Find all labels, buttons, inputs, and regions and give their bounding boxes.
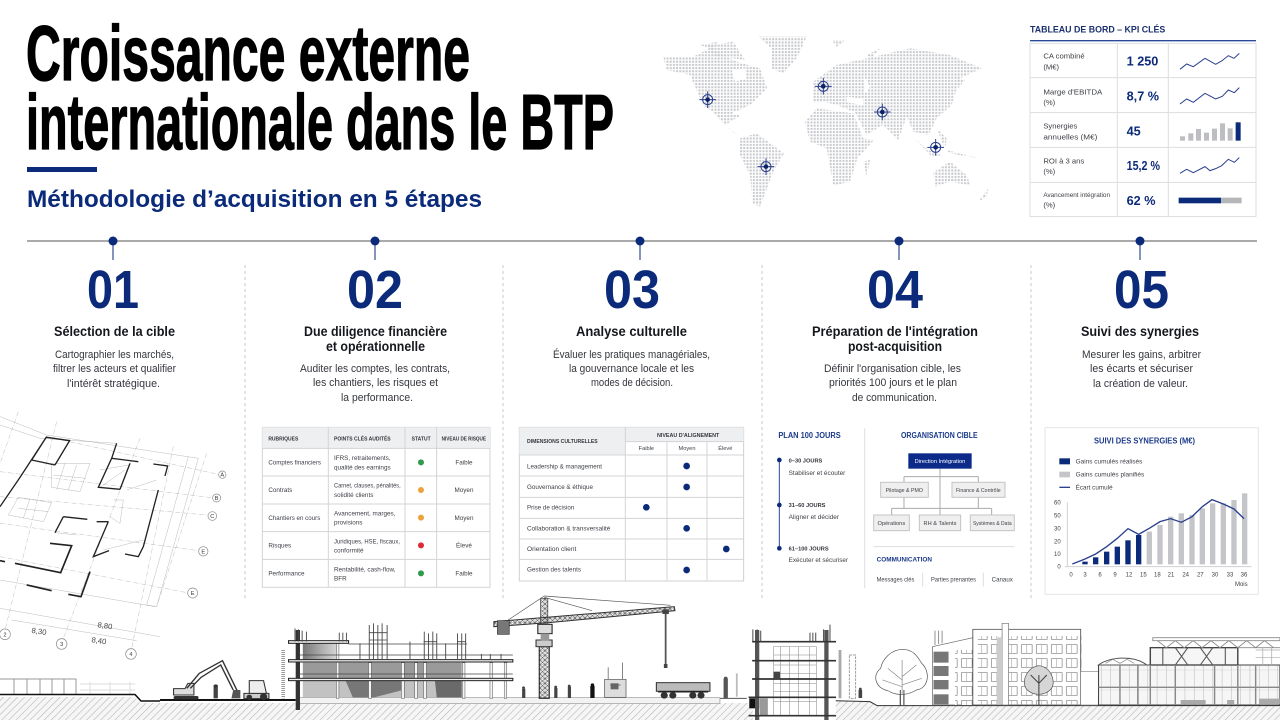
- blueprint floor plan: 2: [3, 632, 7, 638]
- section building: [749, 625, 862, 720]
- synergy chart: 20: [1054, 540, 1061, 546]
- office building: [932, 623, 1081, 705]
- synergy chart: 0: [1057, 565, 1061, 571]
- cultural analysis matrix: Moyen: [678, 446, 695, 452]
- plan 100 jours: [777, 431, 848, 564]
- blueprint floor plan: E: [191, 591, 195, 597]
- title accent bar: [27, 167, 97, 172]
- step 02: les chantiers, les risques et: [313, 377, 438, 389]
- cultural analysis matrix: Orientation client: [527, 546, 576, 553]
- step 01: [53, 260, 176, 390]
- organisation chart: Systèmes & Data: [973, 521, 1012, 527]
- communication: Messages clés: [877, 576, 914, 583]
- integration plan and organisation: [777, 428, 1014, 588]
- bulldozer: [244, 681, 269, 700]
- KPI dashboard: 62 %: [1127, 194, 1156, 208]
- legend: Écart cumulé: [1076, 482, 1113, 491]
- blueprint floor plan: E: [201, 549, 205, 555]
- due diligence table: Risques: [268, 543, 291, 550]
- due diligence table: Avancement, marges,: [334, 511, 396, 518]
- step 04: 04: [867, 260, 923, 320]
- communication: Parties prenantes: [931, 576, 976, 583]
- ground section hatch: [0, 697, 1280, 720]
- legend: Gains cumulés réalisés: [1076, 459, 1142, 466]
- step 04: Préparation de l'intégration: [812, 324, 978, 339]
- step 03: la gouvernance locale et les: [569, 363, 694, 375]
- title: Croissance externe: [26, 9, 470, 97]
- step 02: Due diligence financière: [304, 324, 447, 339]
- blueprint floor plan: B: [215, 496, 219, 502]
- step 04: Définir l'organisation cible, les: [824, 363, 961, 375]
- plan 100 jours: Exécuter et sécuriser: [789, 557, 848, 564]
- due diligence table: conformité: [334, 548, 364, 555]
- cityscape section: [720, 623, 1280, 720]
- step 04: priorités 100 jours et le plan: [829, 377, 957, 389]
- blueprint floor plan: 8,80: [97, 620, 113, 631]
- cultural analysis matrix: Gestion des talents: [527, 567, 582, 574]
- step 05: [1081, 260, 1201, 390]
- step 03: [553, 260, 710, 389]
- organisation chart: Pilotage & PMO: [886, 488, 924, 494]
- due diligence table: Comptes financiers: [268, 459, 321, 466]
- step 02: 02: [347, 260, 403, 320]
- step 02: et opérationnelle: [326, 339, 425, 354]
- cultural analysis matrix: Gouvernance & éthique: [527, 484, 593, 491]
- synergy chart: 3: [1083, 573, 1087, 579]
- KPI dashboard: 1 250: [1127, 54, 1158, 68]
- step 02: [300, 260, 450, 404]
- synergy chart: 36: [1241, 573, 1248, 579]
- step 01: filtrer les acteurs et qualifier: [53, 363, 176, 375]
- organisation chart: Direction Intégration: [915, 459, 965, 465]
- synergy chart: 10: [1054, 552, 1061, 558]
- synergy chart: 12: [1126, 573, 1133, 579]
- KPI dashboard: Marge d'EBITDA: [1043, 87, 1103, 96]
- due diligence table: [262, 427, 490, 587]
- legend: Gains cumulés planifiés: [1076, 472, 1144, 479]
- cultural analysis matrix: Leadership & management: [527, 463, 602, 470]
- organisation chart: Finance & Contrôle: [956, 488, 1001, 494]
- due diligence table: Élevé: [456, 541, 472, 550]
- step 05: Suivi des synergies: [1081, 324, 1199, 339]
- step 03: Évaluer les pratiques managériales,: [553, 348, 710, 361]
- blueprint floor plan: 4: [129, 652, 133, 658]
- blueprint floor plan: 8,30: [31, 626, 47, 637]
- synergy chart: 9: [1113, 573, 1117, 579]
- plan 100 jours: Stabiliser et écouter: [789, 470, 845, 477]
- organisation chart: RH & Talents: [924, 521, 957, 527]
- due diligence table: NIVEAU DE RISQUE: [442, 436, 486, 442]
- step 05: les écarts et sécuriser: [1090, 363, 1193, 375]
- communication: COMMUNICATION: [877, 557, 932, 564]
- cultural analysis matrix: NIVEAU D'ALIGNEMENT: [657, 433, 720, 439]
- KPI dashboard: 15,2 %: [1127, 159, 1160, 173]
- world map with target markers: [663, 37, 988, 207]
- step 04: post-acquisition: [848, 339, 942, 354]
- subtitle: Méthodologie d’acquisition en 5 étapes: [27, 186, 482, 213]
- timeline: [27, 236, 1257, 260]
- plan 100 jours: 61–100 JOURS: [789, 546, 829, 552]
- due diligence table: Moyen: [454, 487, 474, 494]
- synergy chart: SUIVI DES SYNERGIES (M€): [1094, 436, 1195, 445]
- KPI dashboard: annuelles (M€): [1043, 132, 1098, 141]
- tower crane: [494, 596, 675, 698]
- legend: [1059, 458, 1144, 491]
- cultural analysis matrix: Collaboration & transversalité: [527, 526, 611, 533]
- synergy chart: 6: [1098, 573, 1102, 579]
- truck and workers: [522, 663, 710, 699]
- due diligence table: Carnet, clauses, pénalités,: [334, 483, 401, 490]
- due diligence table: Performance: [268, 570, 305, 577]
- blueprint floor plan: 3: [60, 642, 63, 648]
- synergy chart: 50: [1054, 514, 1061, 520]
- title: internationale dans le BTP: [26, 78, 614, 166]
- blueprint floor plan: C: [210, 514, 214, 520]
- plan 100 jours: 0–30 JOURS: [789, 459, 823, 465]
- plan 100 jours: 31–60 JOURS: [789, 503, 826, 509]
- due diligence table: IFRS, retraitements,: [334, 455, 391, 462]
- KPI dashboard: (%): [1043, 98, 1056, 107]
- step 05: Mesurer les gains, arbitrer: [1082, 349, 1201, 361]
- KPI dashboard: 8,7 %: [1127, 90, 1159, 104]
- step 02: Auditer les comptes, les contrats,: [300, 363, 450, 375]
- synergy chart: 30: [1054, 527, 1061, 533]
- large tree: [876, 649, 927, 705]
- KPI dashboard: Avancement intégration: [1043, 192, 1110, 199]
- KPI dashboard: (%): [1043, 167, 1056, 176]
- due diligence table: qualité des earnings: [334, 464, 391, 471]
- plan 100 jours: Aligner et décider: [789, 514, 839, 521]
- due diligence table: Faible: [455, 570, 473, 577]
- organisation chart: ORGANISATION CIBLE: [901, 431, 978, 440]
- KPI dashboard: Synergies: [1043, 122, 1078, 131]
- communication: [877, 557, 1014, 587]
- due diligence table: Moyen: [454, 515, 474, 522]
- due diligence table: POINTS CLÉS AUDITÉS: [334, 434, 391, 442]
- due diligence table: Faible: [455, 459, 473, 466]
- step 03: Analyse culturelle: [576, 324, 687, 339]
- due diligence table: Contrats: [268, 487, 292, 494]
- synergy chart: 33: [1227, 573, 1234, 579]
- cultural analysis matrix: Élevé: [718, 445, 732, 452]
- step 01: Sélection de la cible: [54, 324, 175, 339]
- blueprint floor plan: A: [220, 473, 224, 479]
- step 03: 03: [604, 260, 660, 320]
- synergy chart: Mois: [1235, 582, 1248, 588]
- KPI dashboard: (M€): [1043, 62, 1060, 71]
- small tree: [1024, 666, 1053, 705]
- synergy chart: 0: [1069, 573, 1073, 579]
- cultural analysis matrix: Faible: [639, 446, 654, 452]
- synergy chart: 24: [1182, 573, 1190, 579]
- due diligence table: provisions: [334, 520, 362, 527]
- due diligence table: solidité clients: [334, 492, 373, 499]
- synergy chart: [1045, 428, 1258, 594]
- organisation chart: [874, 431, 1014, 531]
- step 04: [812, 260, 978, 404]
- due diligence table: RUBRIQUES: [268, 436, 299, 442]
- left fence and terrain line: [0, 679, 160, 701]
- KPI dashboard: [1030, 23, 1256, 217]
- KPI title: TABLEAU DE BORD – KPI CLÉS: [1030, 23, 1165, 34]
- cultural analysis matrix: DIMENSIONS CULTURELLES: [527, 439, 598, 445]
- synergy chart: 60: [1054, 500, 1061, 506]
- KPI dashboard: 45: [1127, 124, 1141, 138]
- building under construction: [283, 623, 513, 710]
- due diligence table: BFR: [334, 575, 347, 582]
- plan 100 jours: PLAN 100 JOURS: [778, 431, 841, 440]
- organisation chart: Opérations: [877, 521, 905, 527]
- due diligence table: Rentabilité, cash-flow,: [334, 566, 396, 573]
- step 01: l'intérêt stratégique.: [67, 378, 160, 390]
- synergy chart: 15: [1140, 573, 1147, 579]
- excavator: [174, 661, 240, 699]
- construction site section: [160, 596, 720, 710]
- KPI dashboard: CA combiné: [1043, 52, 1085, 61]
- step 05: 05: [1114, 260, 1169, 320]
- synergy chart: 21: [1168, 573, 1175, 579]
- cultural analysis matrix: [519, 427, 744, 581]
- step 03: modes de décision.: [591, 377, 673, 389]
- step 05: la création de valeur.: [1093, 378, 1188, 390]
- due diligence table: Chantiers en cours: [268, 515, 320, 522]
- blueprint floor plan: 8,40: [91, 635, 107, 646]
- KPI dashboard: (%): [1043, 201, 1056, 210]
- title: [26, 9, 614, 166]
- communication: Canaux: [992, 576, 1014, 583]
- KPI dashboard: ROI à 3 ans: [1043, 156, 1084, 165]
- synergy chart: 30: [1212, 573, 1219, 579]
- due diligence table: Juridiques, HSE, fiscaux,: [334, 538, 400, 545]
- due diligence table: STATUT: [412, 436, 431, 442]
- step 04: de communication.: [852, 392, 937, 404]
- cultural analysis matrix: Prise de décision: [527, 504, 575, 511]
- step 01: Cartographier les marchés,: [55, 349, 174, 361]
- blueprint floor plan: [0, 412, 226, 659]
- step 01: 01: [87, 260, 139, 320]
- synergy chart: 27: [1197, 573, 1204, 579]
- step 02: la performance.: [341, 392, 413, 404]
- pavilion building: [1081, 638, 1280, 705]
- synergy chart: 18: [1154, 573, 1161, 579]
